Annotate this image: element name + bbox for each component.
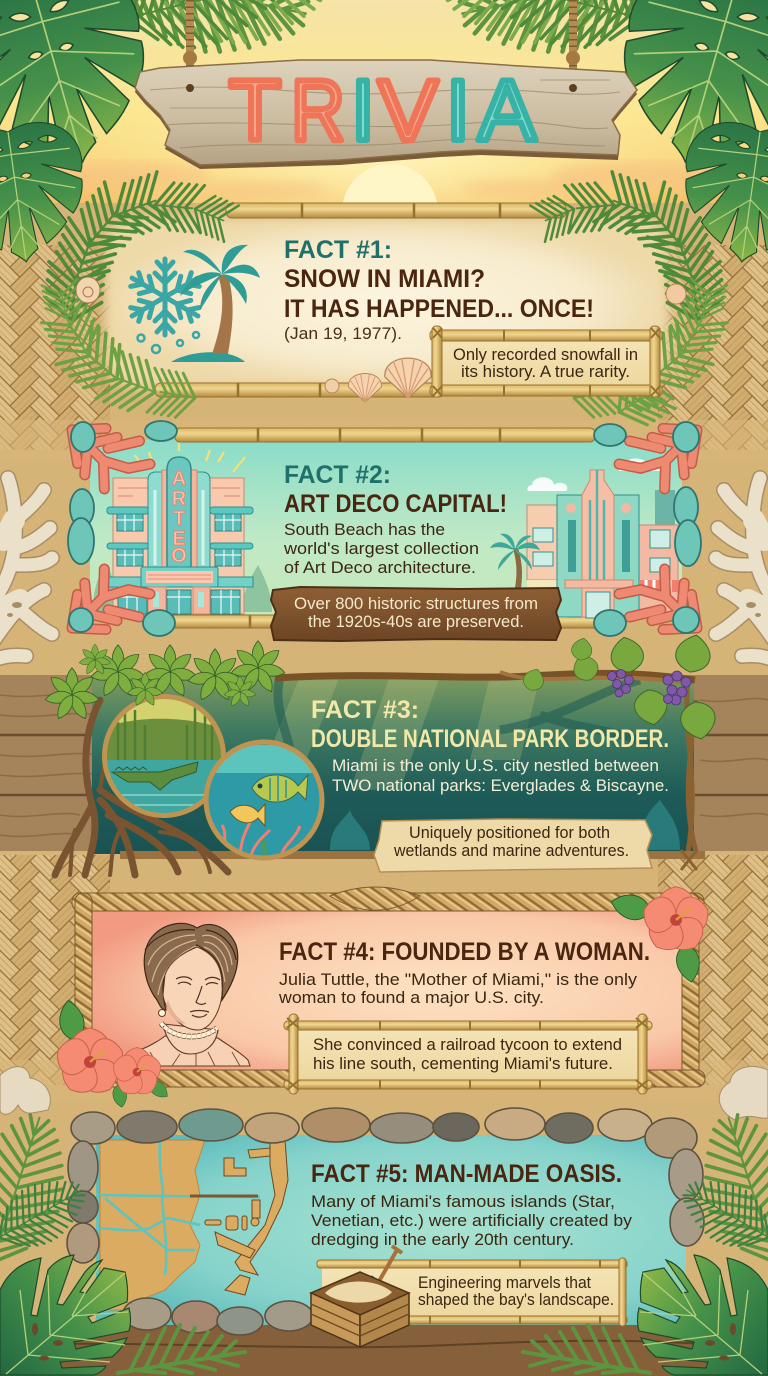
wood planks (0, 675, 768, 851)
face (163, 947, 222, 1030)
heading: fact 4: FACT #4: FOUNDED BY A WOMAN. (279, 938, 650, 966)
palm fronds bottom sides (0, 1103, 768, 1284)
palm wreath left (42, 172, 239, 420)
mangrove roots (55, 700, 228, 875)
callout text: the 1920s-40s are preserved. (308, 613, 524, 631)
palm fronds bottom right (523, 1325, 650, 1373)
title: TRIVIA: A (478, 63, 537, 159)
callout text: Engineering marvels that (418, 1274, 591, 1292)
body text: Venetian, etc.) were artificially created by (311, 1212, 633, 1230)
shells (325, 358, 431, 402)
body text: world's largest collection (283, 540, 479, 558)
sky background (0, 0, 768, 260)
callout text: its history. A true rarity. (461, 363, 630, 381)
heading line 2: SNOW IN MIAMI? (284, 265, 485, 293)
callout text: wetlands and marine adventures. (393, 842, 629, 860)
stone border (67, 1108, 704, 1335)
tower letters (171, 468, 187, 567)
callout text: shaped the bay's landscape. (418, 1291, 614, 1309)
monstera leaf bottom left (0, 1255, 130, 1375)
portrait (142, 923, 250, 1066)
body text: Many of Miami's famous islands (Star, (311, 1193, 615, 1211)
building: left art deco (105, 443, 253, 614)
heading: fact 2: FACT #2: (284, 461, 391, 489)
callout text: Uniquely positioned for both (409, 824, 610, 842)
light rays (250, 676, 540, 800)
vine leaves and grapes (520, 632, 718, 742)
body text: TWO national parks: Everglades & Biscayne. (332, 777, 669, 795)
panel: fact 3 (0, 632, 768, 875)
heading: fact 5: FACT #5: MAN-MADE OASIS. (311, 1160, 622, 1188)
background trees (93, 565, 272, 612)
lower corals (0, 1066, 768, 1120)
tower letters: O (171, 545, 187, 567)
title: TRIVIA: V (378, 63, 438, 159)
sign ropes (183, 0, 580, 88)
body text: Julia Tuttle, the "Mother of Miami," is the only (279, 971, 638, 989)
callout text (313, 1036, 622, 1073)
sign grain (150, 80, 620, 148)
callout text: his line south, cementing Miami's future. (313, 1055, 613, 1073)
rope frame (72, 887, 705, 1087)
callout text (453, 346, 638, 381)
panel: fact 1 (42, 172, 727, 434)
callout: fact 1 (430, 326, 662, 397)
woven mat upper (0, 245, 768, 450)
bottom wood (0, 1322, 768, 1376)
top bamboo (226, 203, 566, 218)
title: TRIVIA: R (291, 63, 345, 159)
panel: fact 4 (52, 887, 713, 1108)
panel: fact 2 (68, 421, 701, 641)
circle: biscayne (205, 742, 325, 860)
monstera leaf bottom right (638, 1255, 768, 1375)
map of biscayne bay (100, 1140, 288, 1310)
callout: fact 5 (317, 1258, 627, 1326)
heading: fact 3: FACT #3: (311, 696, 419, 724)
heading line 2: DOUBLE NATIONAL PARK BORDER. (311, 725, 669, 753)
body text (332, 757, 669, 795)
fish (252, 775, 308, 802)
hair (144, 923, 238, 1010)
body text (283, 521, 479, 577)
palm wreath right (530, 172, 727, 434)
icon: snow dots (138, 332, 199, 353)
forest background (92, 676, 694, 854)
monstera leaves left (0, 0, 172, 271)
bottom bamboo (155, 383, 445, 397)
body text: of Art Deco architecture. (284, 559, 476, 577)
icon: palm tree (171, 245, 260, 362)
callout text (294, 595, 538, 631)
body text: woman to found a major U.S. city. (278, 989, 544, 1007)
hanging sign (135, 0, 637, 169)
title: TRIVIA: T (229, 63, 281, 159)
tower letters: E (172, 528, 186, 550)
heading line 3: IT HAS HAPPENED... ONCE! (284, 295, 594, 323)
palm fronds top (98, 0, 670, 70)
monstera leaves right (596, 0, 768, 271)
windows (117, 514, 241, 614)
title: TRIVIA: I (446, 63, 470, 159)
callout: fact 3 (374, 819, 652, 872)
circle: everglades (100, 695, 230, 820)
sign board (135, 60, 637, 165)
side shells (76, 277, 686, 304)
sand fades (0, 420, 768, 1100)
marquee (105, 577, 253, 587)
pearl collar (161, 1023, 217, 1037)
coral corners (72, 422, 697, 636)
sign edge (135, 64, 637, 169)
heading line 2: ART DECO CAPITAL! (284, 490, 507, 518)
bamboo frame (150, 428, 610, 628)
body text: South Beach has the (284, 521, 445, 539)
callout: fact 2 (271, 587, 561, 641)
teal background (90, 440, 682, 618)
tree silhouettes (278, 676, 650, 790)
callout text (393, 824, 629, 860)
teal water (96, 1135, 686, 1325)
callout text: Only recorded snowfall in (453, 346, 638, 364)
body text (278, 971, 638, 1007)
icon: crate with shovel (311, 1246, 409, 1347)
palm fronds bottom left (118, 1325, 245, 1373)
side corals (0, 478, 768, 660)
callout text (418, 1274, 614, 1309)
building: right art deco (527, 458, 680, 618)
body text: dredging in the early 20th century. (311, 1231, 574, 1249)
sun rays (118, 443, 245, 472)
tower (148, 472, 210, 570)
heading: fact 1: FACT #1: (284, 236, 392, 264)
callout: fact 4 (284, 1014, 652, 1094)
salmon background (90, 908, 684, 1072)
title: TRIVIA: I (351, 63, 375, 159)
hibiscus bottom left (52, 999, 172, 1108)
body text: Miami is the only U.S. city nestled between (332, 757, 659, 775)
title: TRIVIA (229, 63, 537, 159)
reef silhouette (330, 800, 680, 850)
callout text: Over 800 historic structures from (294, 595, 538, 613)
tower letters: R (172, 488, 187, 510)
callout text: She convinced a railroad tycoon to extend (313, 1036, 622, 1054)
leaf clusters (44, 641, 286, 721)
date: (Jan 19, 1977). (284, 325, 402, 343)
earring (158, 1010, 166, 1016)
vine frame (120, 672, 705, 870)
tower letters: A (172, 468, 186, 490)
icon: small palm (490, 534, 540, 588)
parchment (104, 216, 670, 388)
ground floor panels (148, 587, 210, 614)
panel: fact 5 (67, 1108, 704, 1347)
body text (311, 1193, 633, 1249)
icon: snowflake (127, 259, 203, 335)
woven mat lower (0, 855, 768, 1085)
teal stones (68, 421, 701, 636)
sun (342, 164, 438, 260)
tower letters: T (173, 508, 185, 530)
hibiscus top right (608, 887, 713, 984)
